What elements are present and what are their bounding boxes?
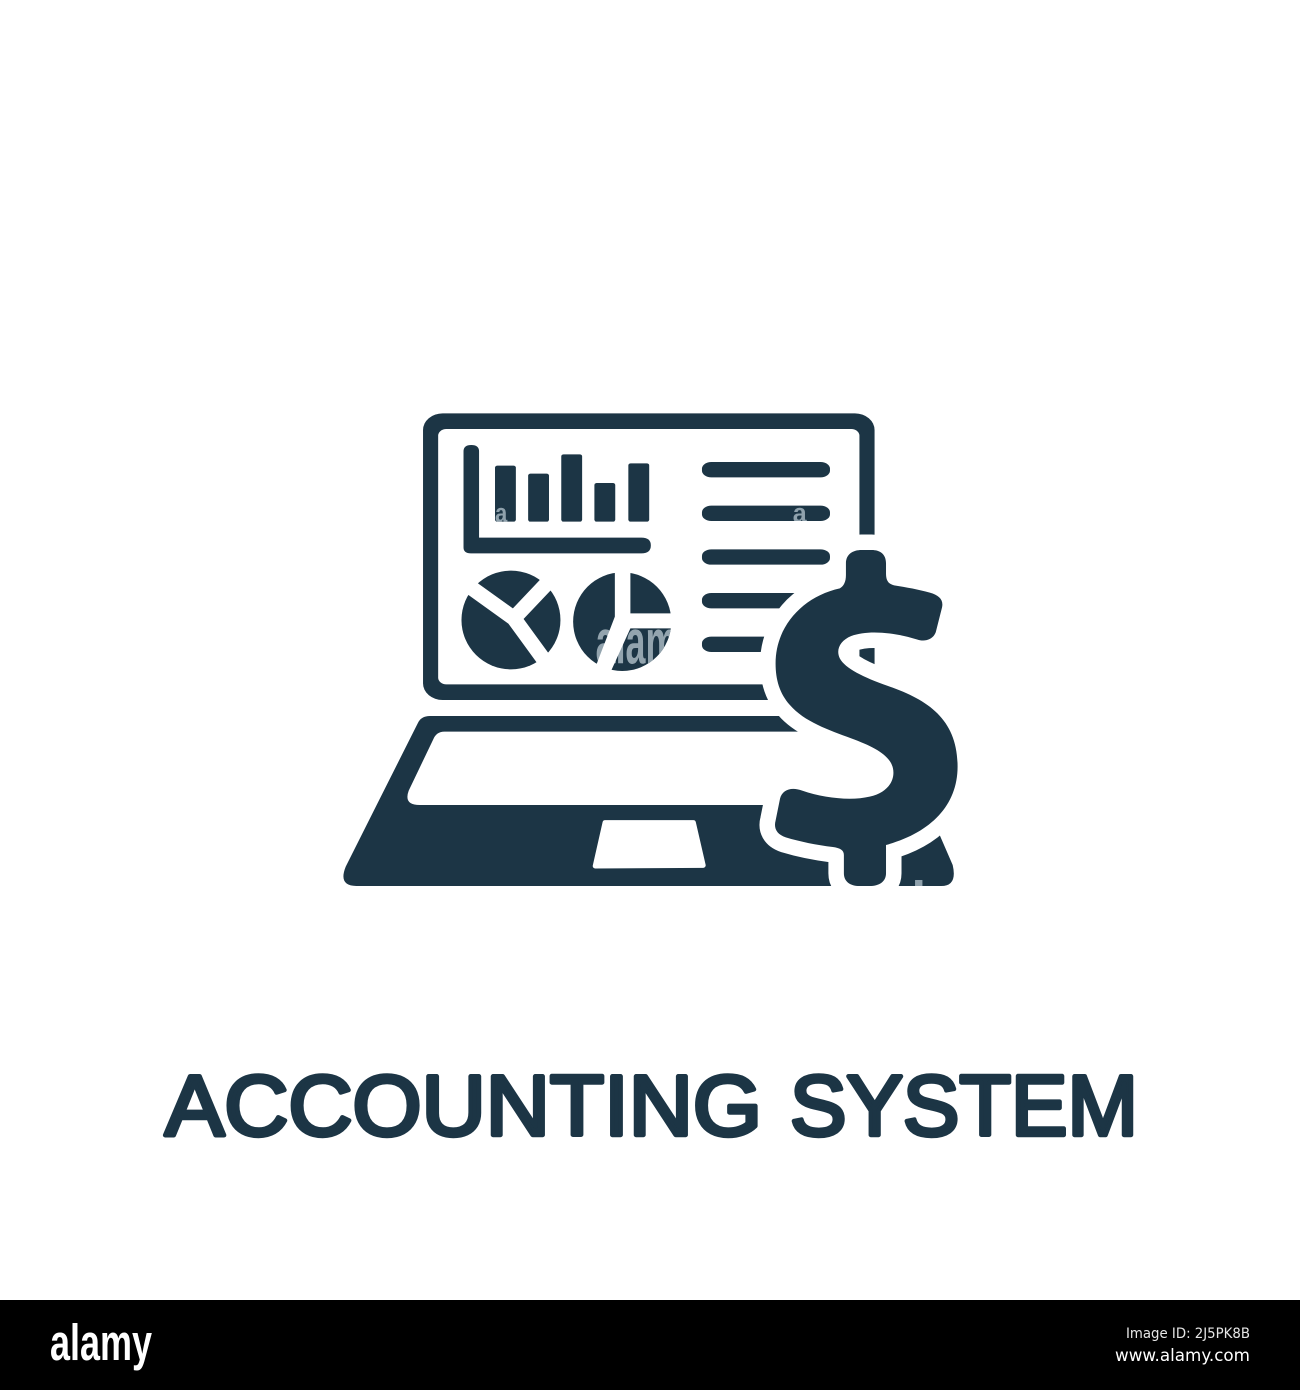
- icon: accounting system laptop with dollar sign: alam: [596, 607, 677, 678]
- pie chart right: [573, 572, 671, 671]
- laptop screen frame: [423, 413, 875, 700]
- icon: accounting system laptop with dollar sign: [343, 413, 958, 886]
- website url: www.alamy.com: [1115, 1346, 1250, 1366]
- title: SYSTEM: [790, 1059, 1138, 1154]
- footer bar: [0, 1300, 1300, 1390]
- text list lines: a: [793, 499, 807, 528]
- laptop keyboard base: [343, 716, 954, 886]
- image id: Image ID: 2J5PK8B: [1126, 1326, 1250, 1342]
- text list lines: [702, 462, 830, 652]
- infographic canvas: [0, 413, 1300, 1390]
- title: [165, 1059, 1138, 1154]
- footer logo: alamy: [50, 1314, 152, 1371]
- bar chart: a: [495, 499, 508, 528]
- title: ACCOUNTING: [165, 1059, 762, 1154]
- icon: dollar sign: [775, 550, 958, 886]
- bar chart: [464, 445, 651, 553]
- pie chart left: [459, 569, 561, 672]
